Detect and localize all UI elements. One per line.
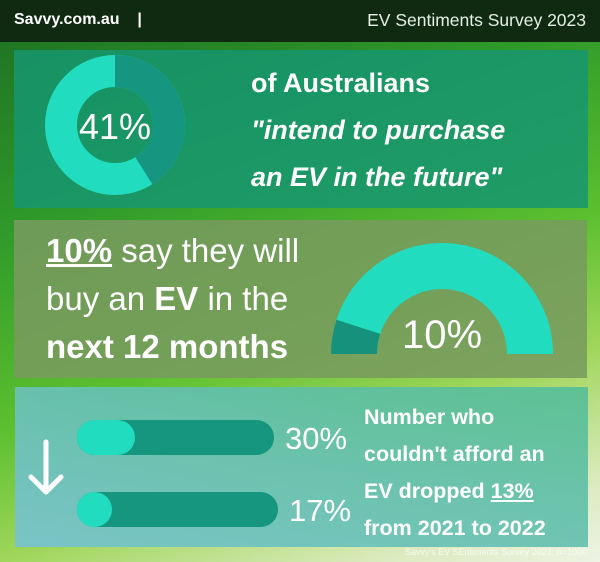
label 30%: 30% bbox=[285, 421, 347, 456]
label 17%: 17% bbox=[289, 493, 351, 528]
donut chart 41% bbox=[45, 55, 185, 195]
statement text: of Australians bbox=[251, 68, 430, 98]
statement text: from 2021 to 2022 bbox=[364, 516, 546, 540]
statement text: 10% say they will bbox=[46, 232, 299, 269]
donut chart 41%: 41% bbox=[79, 106, 151, 147]
statement text: next 12 months bbox=[46, 328, 288, 365]
panel: affordability bbox=[15, 387, 588, 547]
half donut 10%: 10% bbox=[402, 313, 482, 356]
statement text: buy an EV in the bbox=[46, 280, 288, 317]
statement text bbox=[251, 68, 505, 192]
footer source note: Savvy's EV SEntiments Survey 2023: n=1000 bbox=[405, 547, 587, 557]
panel: buy in 12 months bbox=[14, 220, 587, 378]
survey title: EV Sentiments Survey 2023 bbox=[367, 10, 586, 30]
panel: intend to purchase bbox=[14, 50, 588, 208]
statement text: "intend to purchase bbox=[251, 115, 505, 145]
icon: down arrow bbox=[28, 440, 64, 494]
bar 17% bbox=[77, 492, 278, 527]
site name: Savvy.com.au | bbox=[14, 11, 142, 28]
statement text: couldn't afford an bbox=[364, 442, 545, 466]
statement text bbox=[364, 405, 546, 540]
statement text: Number who bbox=[364, 405, 494, 429]
statement text bbox=[46, 232, 299, 365]
bar 30% bbox=[77, 420, 274, 455]
statement text: EV dropped 13% bbox=[364, 479, 534, 503]
half donut 10% bbox=[331, 243, 553, 356]
statement text: an EV in the future" bbox=[251, 162, 502, 192]
header bar bbox=[0, 0, 600, 42]
